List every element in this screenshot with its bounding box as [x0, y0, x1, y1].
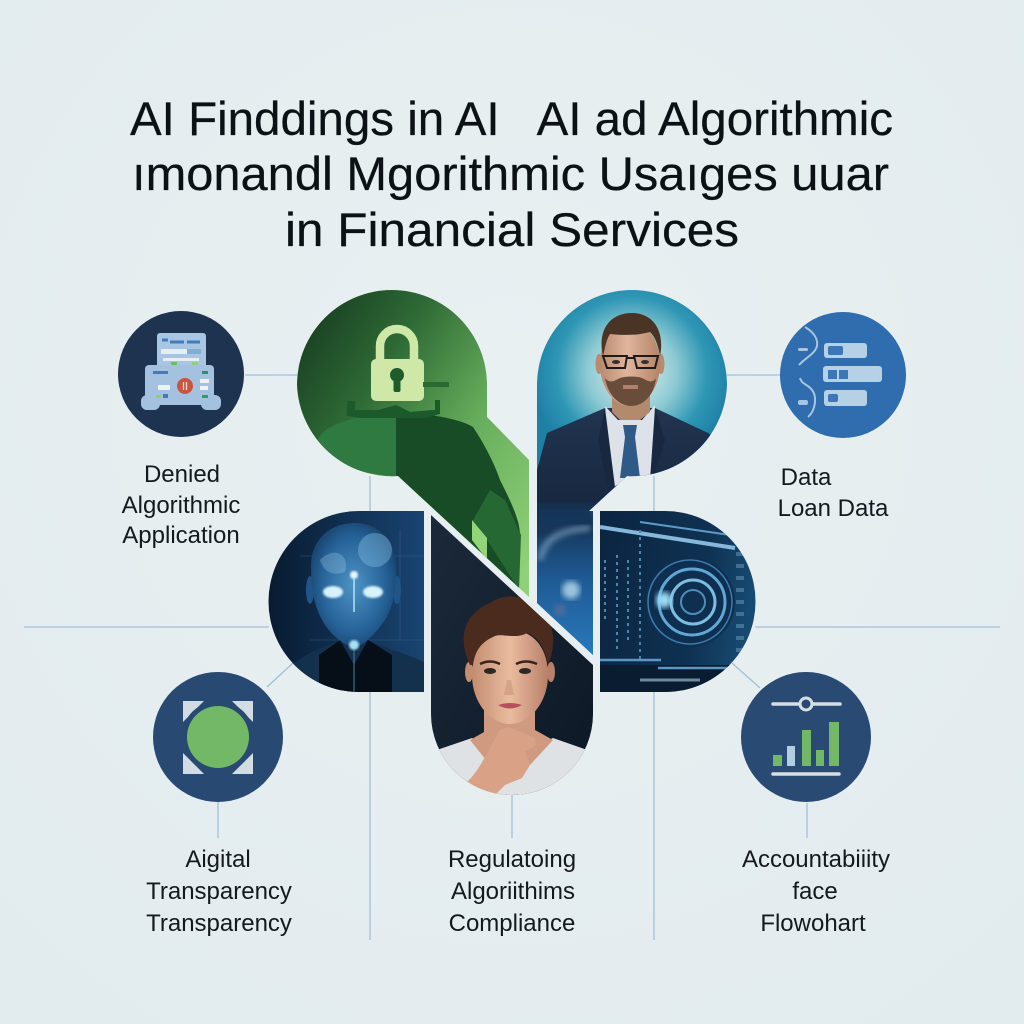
- label: accountability flowchart: [742, 846, 890, 937]
- label: regulating compliance: Regulatoing: [448, 846, 576, 873]
- label: digital transparency: [146, 846, 292, 937]
- panel: businessman portrait: [537, 290, 727, 655]
- label: regulating compliance: Algoriithims: [451, 878, 575, 905]
- label: regulating compliance: [448, 846, 576, 937]
- title: in Financial Services: [285, 203, 739, 256]
- blurred lights: [537, 502, 598, 655]
- label: loan data: Loan Data: [778, 495, 889, 522]
- icon: transparency target: [153, 672, 283, 802]
- label: accountability flowchart: Accountabiiity: [742, 846, 890, 873]
- neck: [470, 705, 553, 765]
- connector lines: [24, 375, 1000, 940]
- label: digital transparency: Transparency: [146, 910, 292, 937]
- icon: data flow: [780, 312, 906, 438]
- shoulders: [292, 640, 424, 692]
- label: denied application: Denied: [144, 461, 220, 488]
- label: accountability flowchart: Flowohart: [760, 910, 866, 937]
- label: accountability flowchart: face: [792, 878, 838, 905]
- white shirt: [439, 738, 585, 795]
- face: [596, 313, 664, 420]
- panel: woman portrait: [431, 515, 593, 795]
- lens: [645, 557, 735, 647]
- icon: application form printer: [118, 311, 244, 437]
- label: denied application: [122, 461, 240, 549]
- title: AI Finddings in AI AI ad Algorithmic: [130, 92, 893, 145]
- face: [464, 596, 555, 724]
- panel: digital lens screen: [600, 511, 756, 692]
- icon: accountability chart: [741, 672, 871, 802]
- label: denied application: Application: [122, 522, 240, 549]
- suit: [537, 408, 710, 523]
- label: denied application: Algorithmic: [122, 492, 240, 519]
- label: regulating compliance: Compliance: [449, 910, 575, 937]
- title: ımonandl Mgorithmic Usaıges uuar: [132, 147, 889, 200]
- label: loan data: [778, 464, 889, 522]
- panel: digital AI head: [268, 511, 424, 692]
- shirt and tie: [598, 405, 665, 495]
- label: loan data: Data: [781, 464, 832, 491]
- sweater figure: [318, 400, 521, 590]
- panel: green padlock figure: [290, 285, 535, 605]
- label: digital transparency: Transparency: [146, 878, 292, 905]
- glowing head: [306, 523, 401, 650]
- hand: [467, 727, 536, 797]
- infographic canvas: [24, 100, 1000, 940]
- title: [130, 92, 893, 256]
- label: digital transparency: Aigital: [185, 846, 251, 873]
- icon: padlock: [371, 329, 449, 401]
